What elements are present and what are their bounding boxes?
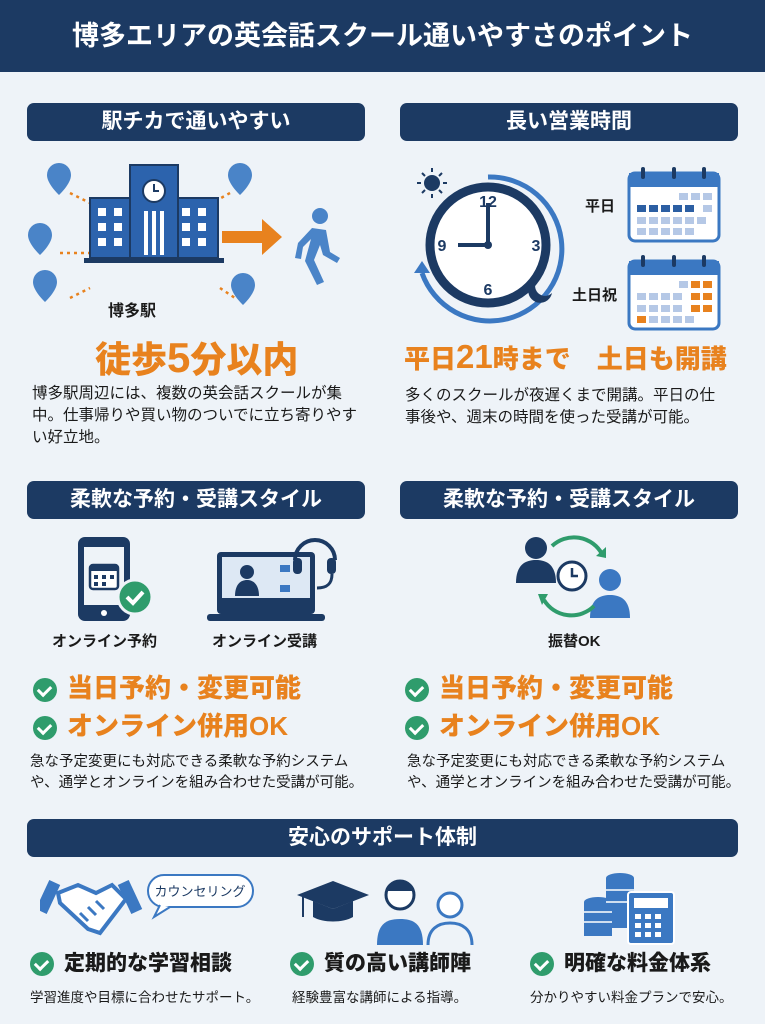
highlight: same-day booking right: 当日予約・変更可能	[439, 673, 673, 703]
icon: reschedule people	[516, 535, 630, 618]
text: flexible description right: 急な予定変更にも対応できる柔軟な予約システムや、通学とオンラインを組み合わせた受講が可能。	[407, 754, 740, 791]
item: pricing: 分かりやすい料金プランで安心。	[530, 990, 732, 1005]
panel: flexible style right	[400, 481, 740, 791]
label: reschedule OK: 振替OK	[548, 633, 601, 650]
item: instructors	[290, 952, 471, 1005]
heading: station: 駅チカで通いやすい	[102, 110, 290, 133]
icon: clock: 9	[438, 238, 447, 255]
text: flexible description left: 急な予定変更にも対応できる柔軟な予約システムや、通学とオンラインを組み合わせた受講が可能。	[30, 754, 363, 791]
item: instructors: 質の高い講師陣	[324, 952, 471, 975]
label: online lessons: オンライン受講	[212, 633, 317, 650]
icon: station building with pins	[28, 163, 340, 305]
heading: flexible left: 柔軟な予約・受講スタイル	[70, 488, 322, 511]
highlight: same-day booking: 当日予約・変更可能	[67, 673, 301, 703]
icon: coins and calculator	[584, 873, 675, 945]
panel: support	[27, 819, 738, 1005]
highlight: hours: 平日21時まで 土日も開講	[404, 338, 727, 375]
title bar	[0, 0, 765, 72]
label: weekdays: 平日	[585, 198, 615, 215]
panel: station	[27, 103, 365, 446]
panel: long hours	[400, 103, 738, 426]
label: weekends: 土日祝	[572, 287, 617, 304]
icon: cap and teachers	[297, 880, 474, 945]
label: Hakata station: 博多駅	[108, 303, 156, 320]
heading: station	[27, 103, 365, 141]
icon: clock: 3	[532, 238, 541, 255]
item: consultation	[30, 952, 259, 1005]
icon: handshake and speech bubble: カウンセリング	[154, 884, 246, 899]
heading: hours: 長い営業時間	[506, 110, 632, 133]
item: consultation: 学習進度や目標に合わせたサポート。	[30, 990, 259, 1005]
heading: flexible right	[400, 481, 738, 519]
heading: hours	[400, 103, 738, 141]
heading: flexible left	[27, 481, 365, 519]
item: pricing	[530, 952, 732, 1005]
panel: flexible style left	[27, 481, 365, 791]
highlight: 5 min walk: 徒歩5分以内	[95, 334, 298, 381]
item: consultation: 定期的な学習相談	[64, 952, 232, 975]
icon: weekend calendar	[628, 255, 720, 330]
heading: support: 安心のサポート体制	[288, 826, 477, 849]
icon: handshake and speech bubble	[40, 874, 254, 936]
highlight: online OK: オンライン併用OK	[67, 711, 288, 741]
icon: laptop with headset	[207, 538, 337, 621]
icon: clock: 6	[484, 282, 493, 299]
icon: clock: 12	[479, 194, 497, 211]
heading: flexible right: 柔軟な予約・受講スタイル	[443, 488, 695, 511]
label: online booking: オンライン予約	[52, 633, 157, 650]
icon: phone with check	[78, 537, 150, 621]
text: hours description: 多くのスクールが夜遅くまで開講。平日の仕事後や、週末の時間を使った受講が可能。	[405, 387, 715, 426]
item: instructors: 経験豊富な講師による指導。	[292, 990, 467, 1005]
heading: support	[27, 819, 738, 857]
item: pricing: 明確な料金体系	[564, 952, 711, 975]
text: station description: 博多駅周辺には、複数の英会話スクールが集中。仕事帰りや買い物のついでに立ち寄りやすい好立地。	[32, 385, 357, 446]
highlight: online OK right: オンライン併用OK	[439, 711, 660, 741]
title bar: 博多エリアの英会話スクール通いやすさのポイント	[72, 21, 693, 51]
icon: weekday calendar	[628, 167, 720, 242]
icon: clock	[414, 168, 564, 324]
